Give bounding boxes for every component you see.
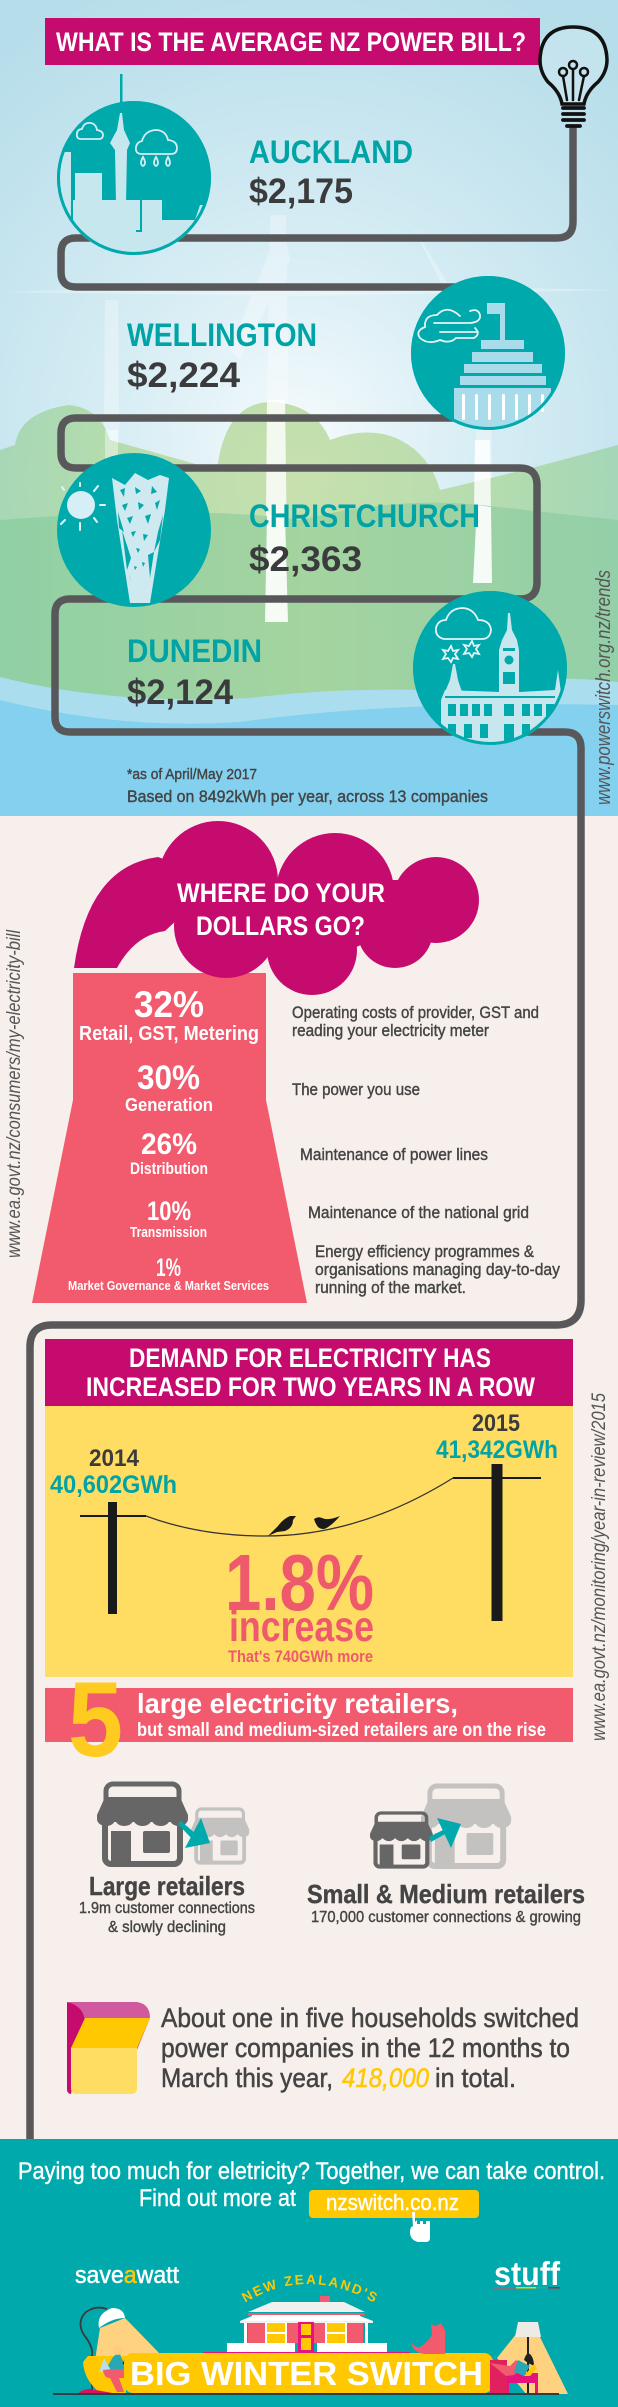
illustration: left lamp and reader — [78, 2308, 160, 2394]
chart labels: bill percentages: 1% — [156, 1254, 181, 1282]
callout: one in five households — [161, 2003, 579, 2093]
icon: large retailers shops — [97, 1784, 249, 1865]
chart descriptions: Operating costs of provider, GST and — [292, 1003, 539, 1022]
label: Auckland: AUCKLAND — [249, 134, 413, 170]
big stat: increase: 1.8% — [225, 1538, 374, 1627]
chart labels: bill percentages: 26% — [141, 1128, 197, 1161]
icon: Dunedin circle — [413, 591, 567, 745]
chart descriptions: Maintenance of the national grid — [308, 1203, 529, 1222]
footnote: bill basis: *as of April/May 2017 — [127, 766, 257, 783]
callout: one in five households: in total. — [435, 2063, 516, 2093]
big stat: increase — [225, 1538, 374, 1666]
chart descriptions — [292, 1003, 560, 1297]
title banner: WHAT IS THE AVERAGE NZ POWER BILL? — [56, 27, 526, 57]
chimney tower chart — [32, 973, 307, 1303]
cloud heading: where do your dollars go: WHERE DO YOUR — [177, 878, 385, 908]
chart labels: bill percentages: Transmission — [130, 1224, 207, 1241]
chart descriptions: Maintenance of power lines — [300, 1145, 488, 1164]
chart labels: bill percentages: Generation — [125, 1095, 213, 1115]
big stat: increase: increase — [229, 1603, 374, 1651]
demand heading: DEMAND FOR ELECTRICITY HAS — [129, 1343, 491, 1373]
ground line — [53, 2393, 559, 2395]
chart descriptions: organisations managing day-to-day — [315, 1260, 560, 1279]
chart descriptions: The power you use — [292, 1080, 420, 1099]
retailers banner: 5 — [68, 1659, 123, 1779]
label: large retailers: Large retailers — [89, 1871, 245, 1901]
chart descriptions: Energy efficiency programmes & — [315, 1242, 535, 1261]
panel: teal footer background — [0, 2139, 618, 2407]
label: Wellington: WELLINGTON — [127, 317, 317, 353]
callout: one in five households: 418,000 — [342, 2063, 429, 2093]
illustration: house — [203, 2296, 410, 2354]
illustration: right lamp and reader — [490, 2322, 568, 2394]
source: ea consumers url: www.ea.govt.nz/consumers/my-electricity-bill — [4, 929, 25, 1258]
retailers banner — [45, 1659, 573, 1779]
label: Dunedin: $2,124 — [127, 673, 234, 712]
source: ea year in review url: www.ea.govt.nz/monitoring/year-in-review/2015 — [589, 1393, 610, 1741]
label: Wellington — [127, 317, 317, 395]
label: large retailers: & slowly declining — [108, 1919, 226, 1936]
chart labels: bill percentages: Distribution — [130, 1159, 208, 1178]
label: large retailers — [79, 1871, 255, 1936]
label: 2015 value — [436, 1410, 558, 1464]
label: Dunedin: DUNEDIN — [127, 633, 262, 669]
chart labels: bill percentages: Retail, GST, Metering — [79, 1023, 259, 1045]
chart labels: bill percentages — [68, 984, 269, 1293]
callout: one in five households: About one in five households switched — [161, 2003, 579, 2033]
chart descriptions: reading your electricity meter — [292, 1021, 489, 1040]
power line — [146, 1478, 453, 1536]
icon: Auckland circle — [57, 74, 211, 262]
call to action text — [18, 2158, 605, 2212]
retailers banner: large electricity retailers, — [137, 1688, 458, 1719]
button: nzswitch link: nzswitch.co.nz — [326, 2190, 459, 2215]
label: 2014 value: 40,602GWh — [50, 1471, 177, 1499]
callout: one in five households: March this year, — [161, 2063, 333, 2093]
label: 2015 value: 41,342GWh — [436, 1436, 558, 1464]
icon: switch book — [67, 2002, 150, 2094]
chart descriptions: running of the market. — [315, 1278, 466, 1297]
label: 2014 value — [50, 1445, 177, 1499]
power wire connecting all sections — [30, 126, 581, 2139]
label: 2015 value: 2015 — [472, 1410, 520, 1437]
cloud heading: where do your dollars go — [74, 821, 479, 995]
label: Christchurch: $2,363 — [249, 540, 362, 579]
demand heading — [45, 1339, 573, 1406]
illustration: cat — [410, 2323, 445, 2354]
chart labels: bill percentages: 10% — [147, 1196, 191, 1226]
label: Christchurch — [249, 498, 480, 579]
label: Dunedin — [127, 633, 262, 712]
retailers banner: but small and medium-sized retailers are on the rise — [137, 1720, 546, 1741]
icon: Christchurch circle — [57, 453, 211, 607]
icon: light bulb — [540, 27, 607, 126]
panel: electricity demand — [45, 1406, 573, 1677]
pole 2014 — [80, 1502, 146, 1614]
logo: stuff: stuff — [494, 2255, 561, 2292]
chart labels: bill percentages: 30% — [137, 1059, 200, 1097]
banner: big winter switch: BIG WINTER SWITCH — [130, 2355, 483, 2392]
cloud heading: where do your dollars go: DOLLARS GO? — [196, 911, 365, 941]
label: 2014 value: 2014 — [89, 1445, 140, 1472]
label: small and medium retailers: 170,000 customer connections & growing — [311, 1909, 581, 1926]
source: powerswitch url: www.powerswitch.org.nz/trends — [593, 570, 615, 805]
label: small and medium retailers — [307, 1879, 585, 1926]
icon: Wellington circle — [411, 276, 565, 430]
icon: pointer hand — [410, 2212, 430, 2242]
icon: small and medium retailers shops — [370, 1786, 511, 1867]
title banner — [45, 18, 540, 65]
label: Christchurch: CHRISTCHURCH — [249, 498, 480, 534]
panel: lower cream background — [0, 816, 618, 2139]
logo: saveawatt: saveawatt — [75, 2262, 179, 2289]
demand heading: INCREASED FOR TWO YEARS IN A ROW — [86, 1372, 535, 1402]
campaign arc text: NEW ZEALAND'S — [241, 2274, 377, 2302]
chart labels: bill percentages: Market Governance & Market Services — [68, 1278, 269, 1293]
call to action text: Find out more at — [139, 2185, 296, 2212]
icon: birds on wire — [268, 1516, 340, 1536]
label: Auckland: $2,175 — [249, 172, 353, 211]
pole 2015 — [453, 1464, 541, 1621]
big stat: increase: That's 740GWh more — [228, 1647, 373, 1666]
label: small and medium retailers: Small & Medium retailers — [307, 1879, 585, 1909]
callout: one in five households: power companies in the 12 months to — [161, 2033, 570, 2063]
footnote: bill basis — [127, 766, 488, 806]
chart labels: bill percentages: 32% — [134, 984, 204, 1025]
label: Auckland — [249, 134, 413, 211]
footnote: bill basis: Based on 8492kWh per year, across 13 companies — [127, 787, 488, 806]
label: large retailers: 1.9m customer connections — [79, 1900, 255, 1917]
panel: sky and landscape background — [0, 0, 618, 816]
label: Wellington: $2,224 — [127, 356, 241, 395]
